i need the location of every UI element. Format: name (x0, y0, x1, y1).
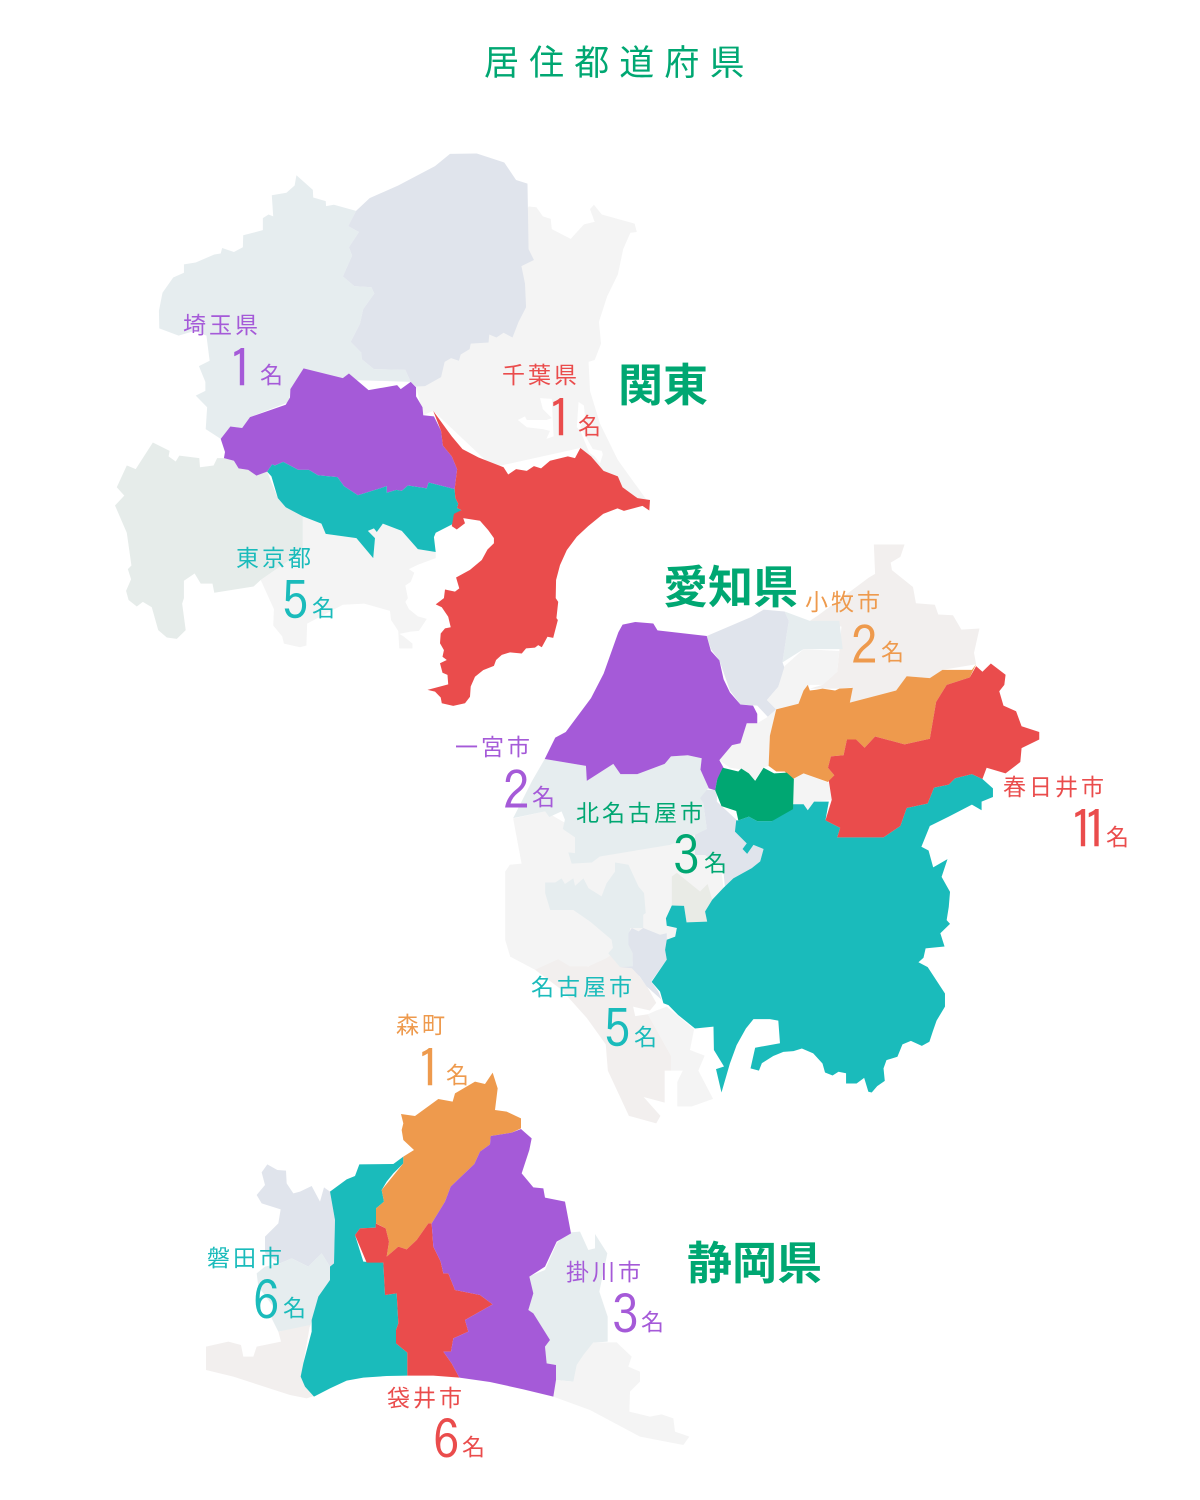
label: Nagoya 5: 5 (604, 1002, 630, 1055)
heading: Aichi: 愛知県 (663, 562, 798, 613)
region: northeast (810, 545, 979, 703)
region: north grey-blue (707, 610, 789, 717)
lake: white inlet (518, 398, 554, 439)
label: Tokyo 5: 5 (282, 574, 308, 627)
region: north pale (783, 612, 843, 662)
label: Nagoya 5 (531, 974, 657, 1055)
region: Tokyo (267, 462, 461, 558)
region: centre light (719, 709, 776, 781)
label: Kakegawa 3: 3 (612, 1288, 638, 1341)
label: Komaki 2: 小牧市 (805, 589, 883, 615)
region: Kita-Nagoya area (513, 755, 709, 864)
heading: Kanto: 関東 (618, 360, 708, 411)
lake: white river (577, 402, 603, 464)
region: east of Kita-Nagoya (695, 790, 764, 887)
region: Mori (376, 1073, 521, 1257)
label: Chiba 1: 千葉県 (502, 362, 580, 388)
label: Kasugai 11: 春日井市 (1003, 774, 1107, 800)
region: Ichinomiya (545, 622, 757, 790)
label: Fukuroi 6: 袋井市 (387, 1385, 465, 1411)
label: Mori 1: 1 (416, 1042, 442, 1095)
label: Tokyo 5 (236, 545, 335, 627)
map: Shizuoka (206, 1073, 689, 1445)
label: Ichinomiya 2: 一宮市 (455, 734, 533, 760)
label: Kasugai 11: 名 (1106, 824, 1129, 850)
region: Saitama (221, 368, 457, 495)
label: Saitama 1: 埼玉県 (183, 312, 261, 338)
region: inner pale (545, 863, 646, 967)
region: Kanagawa (261, 516, 436, 648)
label: Fukuroi 6 (387, 1385, 485, 1466)
region: Nagoya (652, 774, 993, 1092)
label: Ichinomiya 2: 名 (532, 784, 555, 810)
region: south-west pink (206, 1325, 314, 1398)
region: north-west grey-blue (257, 1164, 335, 1267)
label: Mori 1: 名 (446, 1062, 469, 1088)
label: Iwata 6 (207, 1245, 306, 1327)
label: Iwata 6: 名 (283, 1295, 306, 1321)
label: Chiba 1: 1 (547, 392, 574, 445)
label: Kita-Nagoya 3: 3 (673, 829, 700, 882)
label: Kita-Nagoya 3 (576, 800, 727, 882)
label: Kasugai 11 (1003, 774, 1129, 856)
label: Fukuroi 6: 名 (462, 1434, 485, 1460)
region: north light (767, 649, 839, 709)
region: Gunma (159, 175, 411, 439)
region: west light (505, 811, 724, 970)
map: Aichi (505, 545, 1039, 1123)
region: inner grey-blue (620, 928, 667, 1000)
label: Kita-Nagoya 3: 北名古屋市 (576, 800, 706, 826)
region: Fukuroi (355, 1223, 493, 1378)
region: east pale (528, 1232, 608, 1382)
region: west pale (257, 1253, 330, 1332)
region: Iwata (301, 1157, 407, 1397)
label: Mori 1: 森町 (396, 1012, 448, 1038)
region: Ibaraki light area (416, 205, 649, 504)
label: Chiba 1: 名 (578, 413, 601, 439)
label: Chiba 1 (502, 362, 601, 445)
region: south pink (535, 948, 671, 1123)
label: Ichinomiya 2: 2 (503, 764, 530, 817)
heading: Shizuoka: 静岡県 (687, 1238, 822, 1289)
region: centre light small (793, 773, 832, 810)
region: south-east light (553, 1342, 689, 1445)
label: Iwata 6: 磐田市 (207, 1245, 285, 1271)
region: Kakegawa (432, 1129, 571, 1397)
label: Komaki 2: 名 (881, 639, 904, 665)
region: Chiba (427, 411, 650, 706)
label: Komaki 2: 2 (851, 619, 878, 672)
region: Kita-Nagoya (715, 768, 794, 821)
region: Kasugai (825, 663, 1039, 837)
region: south light (648, 1007, 713, 1106)
label: Ichinomiya 2 (455, 734, 555, 817)
label: Iwata 6: 6 (253, 1274, 280, 1327)
label: Kita-Nagoya 3: 名 (704, 850, 727, 876)
label: Nagoya 5: 名古屋市 (531, 974, 635, 1000)
label: Saitama 1 (183, 312, 283, 395)
region: Komaki (769, 664, 976, 782)
region: Yamanashi (115, 443, 303, 639)
label: Kakegawa 3: 掛川市 (566, 1259, 644, 1285)
label: Tokyo 5: 名 (312, 595, 335, 621)
label: Komaki 2 (805, 589, 904, 672)
title: 居住都道府県 (484, 44, 755, 83)
region: Tochigi (343, 153, 534, 387)
label: Mori 1 (396, 1012, 469, 1095)
label: Saitama 1: 名 (260, 362, 283, 388)
label: Tokyo 5: 東京都 (236, 545, 314, 571)
label: Kakegawa 3 (566, 1259, 664, 1341)
label: Nagoya 5: 名 (634, 1024, 657, 1050)
label: Kakegawa 3: 名 (641, 1309, 664, 1335)
map: Kanto (115, 153, 650, 706)
label: Saitama 1: 1 (228, 342, 254, 395)
region: small khaki (672, 873, 712, 922)
label: Fukuroi 6: 6 (433, 1413, 460, 1466)
label: Kasugai 11: 11 (1069, 803, 1100, 856)
